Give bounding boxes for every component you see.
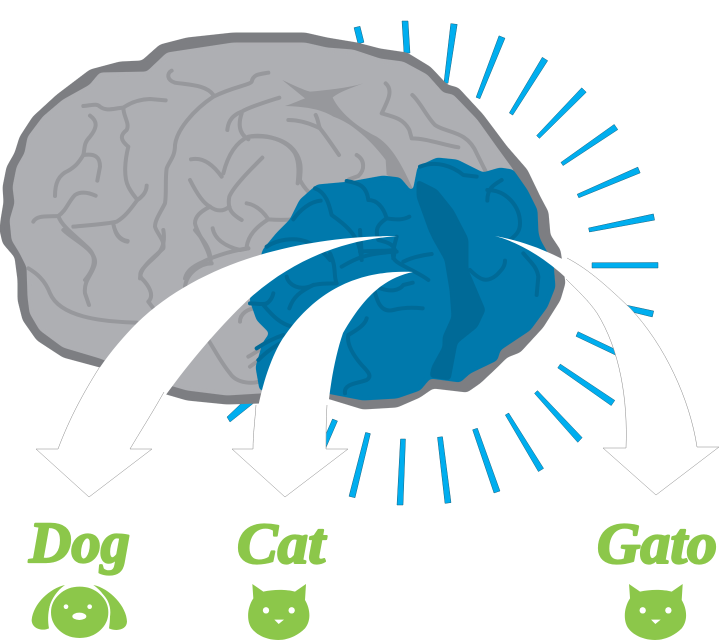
label: Cat: Cat bbox=[237, 511, 327, 576]
blue sulci upper bbox=[267, 164, 520, 260]
grey sulci lower left bbox=[28, 230, 287, 383]
arrow: to Cat bbox=[232, 272, 413, 497]
label: Dog: Dog bbox=[28, 510, 130, 575]
label: Gato: Gato bbox=[597, 511, 717, 576]
icon: cat face under Gato bbox=[625, 584, 686, 640]
brain outer outline bbox=[0, 33, 565, 409]
icon: dog face bbox=[32, 585, 127, 639]
icon: cat face under Cat bbox=[248, 584, 309, 640]
grey sulci upper left bbox=[33, 71, 298, 280]
arrow: to Dog bbox=[36, 236, 397, 497]
blue sulci lower bbox=[250, 230, 538, 393]
brain bbox=[0, 33, 565, 409]
blue activated region bbox=[250, 158, 555, 400]
arrow: to Gato bbox=[495, 236, 719, 495]
brain grey surface bbox=[10, 43, 530, 395]
activation rays bbox=[227, 21, 658, 505]
darker blue fold bbox=[417, 180, 485, 380]
grey sulci upper right with fissure bbox=[250, 80, 487, 192]
